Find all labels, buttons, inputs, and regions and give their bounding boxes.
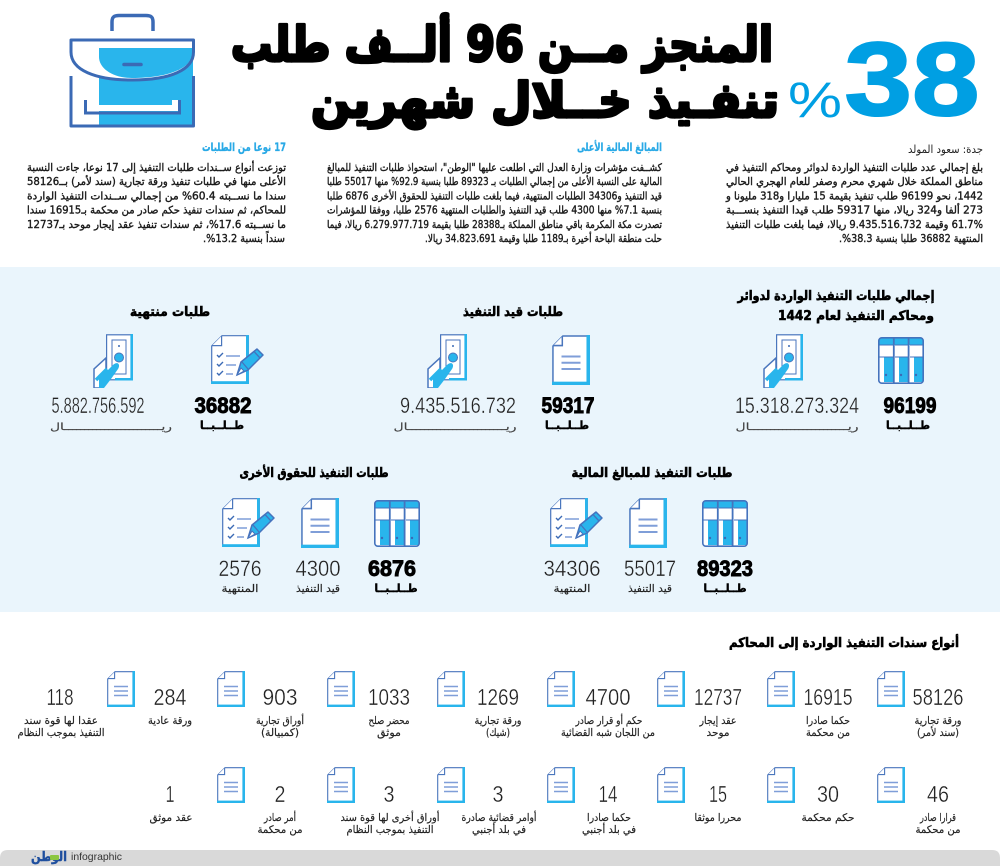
item: 4700 committee decision: 4700 [586, 684, 630, 710]
text block: 17 types: 17 نوعا من الطلبات [202, 140, 286, 155]
item: 16915 court judgment: من محكمة [806, 727, 850, 739]
item: 3 other papers: التنفيذ بموجب النظام [346, 824, 434, 836]
stat: 36882 requests: 36882 [194, 393, 252, 418]
stat: 4300 [296, 556, 340, 595]
item: 3 other papers [340, 781, 440, 836]
stat: 55017 [624, 556, 676, 595]
stat: total value: ريــــــــــــــــــــــــال [736, 422, 859, 433]
stat: 96199 requests: 96199 [884, 393, 936, 418]
item: 58126 commercial paper: (سند لأمر) [917, 726, 959, 739]
icon: document [547, 671, 575, 707]
stat: 96199 requests [884, 393, 936, 432]
item: 284 ordinary paper: 284 [154, 684, 186, 710]
stat: 2576: المنتهية [222, 583, 258, 595]
stat: 36882 requests: طــلــبــا [200, 419, 244, 432]
text block: intro: 273 ألفا و324 ريالا، منها 59317 طلب قيدا التنفيذ بنســـبة [726, 203, 983, 217]
item: 118 contracts [18, 684, 104, 739]
item: 284 ordinary paper: ورقة عادية [148, 715, 192, 727]
icon: document [327, 767, 355, 803]
icon: document [767, 671, 795, 707]
icon: document [217, 671, 245, 707]
panel heading: other rights: طلبات التنفيذ للحقوق الأخرى [240, 464, 388, 481]
heading: bond types: أنواع سندات التنفيذ الواردة إلى المحاكم [729, 634, 959, 651]
item: 4700 committee decision: حكم أو قرار صادر [575, 713, 642, 727]
item: 46 court decisions [916, 781, 960, 836]
headline figure: 38% [788, 22, 980, 138]
item: 58126 commercial paper: ورقة تجارية [914, 715, 962, 727]
item: 46 court decisions: قرارا صادر [919, 812, 956, 824]
item: 118 contracts: عقدا لها قوة سند [24, 715, 98, 727]
stat: 2576: 2576 [218, 556, 262, 581]
stat: 55017: قيد التنفيذ [628, 583, 672, 595]
icon: pen and checklist finished [211, 335, 263, 384]
stat: 6876: طــلــبــا [374, 582, 418, 595]
item: 46 court decisions: 46 [927, 781, 949, 807]
text block: intro: المنتهية 36882 طلبا بنسبة 38.3%. [839, 233, 983, 245]
icon: hand with money under execution [428, 334, 467, 388]
item: 12737 unified lease: موحد [706, 727, 730, 739]
item: 3 foreign orders: أوامر قضائية صادرة [462, 810, 537, 824]
icon: document [657, 671, 685, 707]
stat: 34306: 34306 [544, 556, 600, 581]
text block: intro: مناطق المملكة خلال شهري محرم وصفر للعام الهجري الحالي [726, 176, 983, 188]
panel: statistics background [0, 267, 1000, 612]
text block: intro [725, 143, 983, 245]
item: 46 court decisions: من محكمة [916, 824, 960, 836]
stat: total value [735, 393, 859, 433]
icon: document [217, 767, 245, 803]
text block: highest amounts: قيد التنفيذ و34306 الطلبات المنتهية، فيما بلغت طلبات التنفيذ للحقوق الأخرى 6876 طلبا [327, 189, 662, 202]
text block: 17 types: الأعلى منها في طلبات تنفيذ ورقة تجارية (سند لأمر) بــ58126 [27, 175, 286, 188]
item: 903 bills of exchange: (كمبيالة) [261, 727, 299, 739]
item: 3 foreign orders [462, 781, 537, 836]
item: 14 foreign judgments: في بلد أجنبي [582, 822, 636, 836]
icon: binders financial [703, 501, 747, 546]
icon: document [877, 671, 905, 707]
icon: document [437, 767, 465, 803]
item: 14 foreign judgments: حكما صادرا [587, 812, 631, 824]
item: 3 foreign orders: 3 [492, 781, 504, 807]
text block: 17 types: للمحاكم، ثم سندات تنفيذ حكم صادر من محكمة بـ16915 سندا [27, 205, 286, 217]
item: 903 bills of exchange [256, 684, 304, 739]
stat: finished value: 5.882.756.592 [52, 393, 144, 418]
icon: hand with money finished [94, 334, 133, 388]
item: 118 contracts: التنفيذ بموجب النظام [18, 727, 104, 739]
item: 16915 court judgment [804, 684, 852, 739]
item: 1 notarized contract [150, 781, 192, 824]
item: 903 bills of exchange: 903 [262, 684, 298, 710]
icon: document [877, 767, 905, 803]
item: 15 notarized: 15 [709, 781, 727, 807]
stat: 59317 requests: 59317 [542, 393, 594, 418]
item: 3 foreign orders: في بلد أجنبي [472, 822, 526, 836]
icon: hand with money total [764, 334, 803, 388]
item: 15 notarized: محررا موثقا [694, 812, 742, 824]
text block: highest amounts: بنسبة 7.1% منها 4300 طلب قيد التنفيذ والطلبات المنتهية 2576 طلبا، ووفقا للمؤشرات [327, 205, 662, 217]
text block: 17 types: سندا ما نســبته 60.4% من إجمالي ســندات التنفيذ الواردة [27, 190, 286, 202]
item: 12737 unified lease: عقد إيجار [699, 715, 736, 727]
item: 3 other papers: 3 [384, 781, 394, 807]
item: 1269 cheque: ورقة تجارية [474, 715, 522, 727]
stat: under execution value [394, 393, 517, 433]
text block: intro: 61.7% وقيمة 9.435.516.732 ريالا، فيما بلغت طلبات التنفيذ [726, 219, 983, 231]
stat: 34306 [544, 556, 600, 595]
stat: 4300: قيد التنفيذ [296, 583, 340, 595]
stat: 34306: المنتهية [554, 583, 590, 595]
item: 1033 settlement record: محضر صلح [368, 715, 410, 727]
stat: 59317 requests: طــلــبــا [545, 419, 589, 432]
item: 3 other papers: أوراق أخرى لها قوة سند [340, 810, 440, 824]
item: 1033 settlement record: موثق [377, 727, 401, 739]
panel heading: total requests [737, 289, 934, 324]
item: 1269 cheque [474, 684, 522, 739]
stat: 89323: طــلــبــا [704, 582, 746, 595]
stat: under execution value: ريــــــــــــــــــــــــال [394, 422, 517, 433]
stat: total value: 15.318.273.324 [735, 393, 859, 418]
item: 2 court order: أمر صادر [263, 810, 296, 824]
icon: document [327, 671, 355, 707]
item: 1 notarized contract: 1 [166, 781, 174, 807]
item: 30 court judgment: حكم محكمة [802, 812, 854, 824]
item: 284 ordinary paper [148, 684, 192, 727]
stat: 89323: 89323 [697, 556, 753, 581]
item: 14 foreign judgments: 14 [598, 781, 618, 807]
footer bar [0, 850, 1000, 866]
item: 1033 settlement record [368, 684, 410, 739]
stat: 4300: 4300 [296, 556, 340, 581]
icon: document financial [629, 498, 667, 548]
text block: intro: جدة: سعود المولد [908, 143, 983, 156]
panel heading: under execution: طلبات قيد التنفيذ [463, 305, 563, 320]
stat: 2576 [218, 556, 262, 595]
item: 12737 unified lease: 12737 [694, 684, 742, 710]
footer bar: infographic [71, 851, 122, 863]
icon: document [437, 671, 465, 707]
panel heading: total requests: إجمالي طلبات التنفيذ الواردة لدوائر [737, 289, 934, 304]
text block: highest amounts: كشــفت مؤشرات وزارة العدل التي اطلعت عليها "الوطن"، استحواذ طلبات التنفيذ للمبالغ [327, 162, 662, 174]
headline figure: 38%: 38 [844, 22, 980, 138]
title: تنفـيذ خــلال شهرين [311, 73, 779, 129]
icon: binders other rights [375, 501, 419, 546]
icon: pen and checklist other rights [222, 498, 274, 547]
stat: 96199 requests: طــلــبــا [886, 419, 930, 432]
item: 4700 committee decision: من اللجان شبه القضائية [561, 727, 655, 739]
title [231, 13, 779, 129]
stat: 89323 [697, 556, 753, 595]
text block: 17 types: توزعت أنواع ســندات طلبات التنفيذ إلى 17 نوعا، جاءت النسبة [27, 160, 286, 174]
stat: 59317 requests [542, 393, 594, 432]
icon: pen and checklist financial [550, 498, 602, 547]
icon: document [657, 767, 685, 803]
icon: document [767, 767, 795, 803]
item: 16915 court judgment: حكما صادرا [806, 715, 850, 727]
item: 1 notarized contract: عقد موثق [150, 812, 192, 824]
stat: 36882 requests [194, 393, 252, 432]
item: 2 court order: 2 [274, 781, 286, 807]
text block: highest amounts: المبالغ المالية الأعلى [577, 140, 662, 154]
panel heading: financial amounts: طلبات التنفيذ للمبالغ المالية [572, 466, 732, 481]
item: 15 notarized [694, 781, 742, 824]
text block: intro: 1442، نحو 96199 طلب تنفيذ بقيمة 15 مليارا و318 مليونا و [725, 190, 983, 202]
icon: document under execution [552, 335, 590, 385]
item: 58126 commercial paper [912, 684, 964, 739]
text block: 17 types: سنداً بنسبة 13.2%. [203, 231, 285, 245]
icon: document [547, 767, 575, 803]
item: 30 court judgment: 30 [817, 781, 839, 807]
stat: under execution value: 9.435.516.732 [400, 393, 516, 418]
text block: intro: بلغ إجمالي عدد طلبات التنفيذ الواردة لدوائر ومحاكم التنفيذ في [726, 162, 983, 174]
icon: document other rights [301, 498, 339, 548]
headline figure: 38%: % [788, 72, 842, 128]
item: 4700 committee decision [561, 684, 655, 739]
item: 30 court judgment [802, 781, 854, 824]
item: 2 court order: من محكمة [258, 824, 302, 836]
text block: highest amounts: حلت منطقة الباحة أخيرة بـ1189 طلبا وقيمة 34.823.691 ريالا. [425, 231, 662, 245]
panel heading: total requests: ومحاكم التنفيذ لعام 1442 [778, 309, 934, 324]
stat: 6876 [368, 556, 418, 595]
item: 58126 commercial paper: 58126 [912, 684, 964, 710]
icon: binders total [879, 338, 923, 383]
footer bar: الوطن [31, 850, 67, 865]
panel heading: finished: طلبات منتهية [130, 305, 210, 320]
icon: briefcase [71, 16, 194, 126]
stat: finished value: ريــــــــــــــــــــــــال [50, 422, 172, 433]
text block: highest amounts: تصدرت مكة المكرمة باقي مناطق المملكة بـ28388 طلبا بقيمة 6.279.977.719 ريالا، فيما [327, 219, 662, 231]
item: 14 foreign judgments [582, 781, 636, 836]
item: 118 contracts: 118 [46, 684, 74, 710]
stat: 6876: 6876 [368, 556, 416, 581]
stat: 55017: 55017 [624, 556, 676, 581]
item: 1269 cheque: 1269 [477, 684, 519, 710]
text block: 17 types: ما نســبته 17.6%، ثم سندات تنفيذ عقد إيجار موحد بـ12737 [27, 219, 286, 231]
text block: 17 types [27, 140, 286, 245]
item: 1033 settlement record: 1033 [368, 684, 410, 710]
item: 1269 cheque: (شيك) [486, 727, 510, 739]
item: 12737 unified lease [694, 684, 742, 739]
item: 16915 court judgment: 16915 [804, 684, 852, 710]
text block: highest amounts: المالية على النسبة الأعلى من إجمالي الطلبات بـ 89323 طلبا بنسبة 92.9% منها 55017 طلبا [327, 175, 662, 188]
text block: highest amounts [327, 140, 662, 245]
icon: document [107, 671, 135, 707]
stat: finished value [50, 393, 172, 433]
title: المنجز مــن 96 ألــف طلب [231, 13, 773, 73]
item: 903 bills of exchange: أوراق تجارية [256, 713, 304, 727]
item: 2 court order [258, 781, 302, 836]
